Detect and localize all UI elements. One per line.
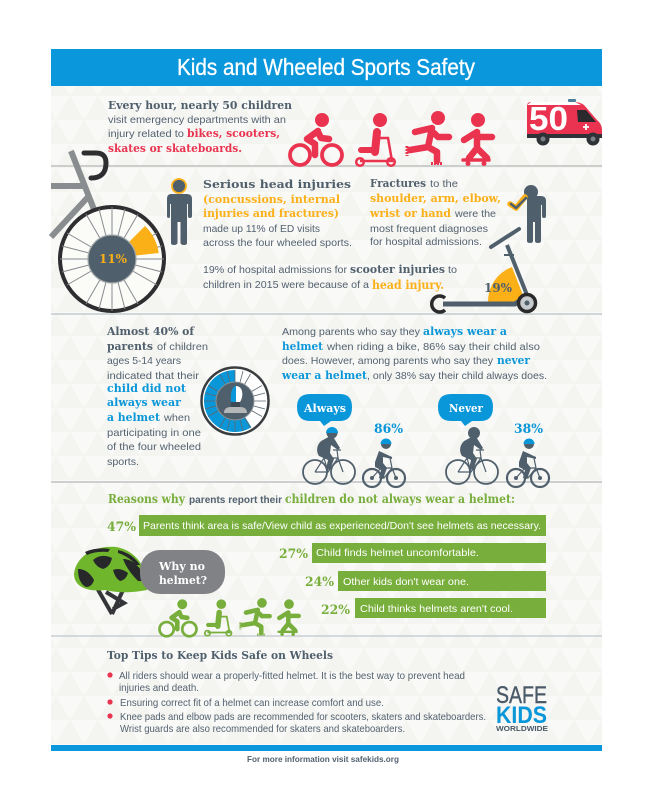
- callout: always: [297, 394, 352, 426]
- text block: scooter hospital admissions: [203, 263, 457, 292]
- text block: serious head injuries: [203, 178, 352, 249]
- text block: parents always and never: [281, 325, 547, 382]
- text block: serious head injuries: injuries and fractures): [203, 207, 339, 220]
- tips list: injuries and death.: [119, 682, 199, 694]
- bar: 27 percent: 27%: [279, 547, 309, 562]
- text block: almost 40 percent: child did not: [107, 382, 187, 395]
- text block: fractures: wrist or hand: [369, 207, 451, 220]
- icon: person with head highlighted: [167, 179, 192, 245]
- bottom blue bar: [51, 745, 602, 751]
- intro text block: visit emergency departments with an: [108, 114, 286, 126]
- text block: parents always and never: wear a helmet: [281, 369, 368, 382]
- title banner: Kids and Wheeled Sports Safety: [177, 54, 475, 80]
- bar: 22 percent: Child thinks helmets aren't cool.: [360, 603, 513, 615]
- title banner: [51, 49, 602, 86]
- callout: why no helmet: Why no: [158, 560, 205, 573]
- text block: parents always and never: does. However, among parents who say they: [282, 355, 494, 367]
- text block: almost 40 percent: a helmet: [107, 411, 161, 424]
- tips list: All riders should wear a properly-fitted helmet. It is the best way to prevent head: [119, 670, 465, 682]
- bar: 27 percent: [279, 543, 546, 563]
- text block: parents always and never: helmet: [282, 340, 324, 353]
- logo: Safe Kids Worldwide: WORLDWIDE: [496, 724, 548, 733]
- text block: fractures: [369, 177, 501, 248]
- icons: red riders: [290, 111, 492, 166]
- text block: almost 40 percent: always wear: [107, 396, 181, 409]
- callout: never: Never: [449, 402, 483, 415]
- text block: scooter hospital admissions: scooter injuries: [350, 263, 445, 276]
- callout: never: [438, 394, 493, 426]
- icon: helmeted parent on bike: [303, 427, 355, 484]
- logo: Safe Kids Worldwide: KIDS: [496, 702, 547, 729]
- bar: 47 percent: 47%: [107, 520, 137, 535]
- bar: 24 percent: [305, 571, 546, 591]
- text block: almost 40 percent: indicated that their: [107, 370, 200, 382]
- text block: serious head injuries: made up 11% of ED visits: [203, 223, 320, 235]
- heading: reasons: children do not always wear a helmet:: [285, 492, 515, 506]
- text block: almost 40 percent: Almost 40% of: [106, 325, 195, 338]
- intro text block: [108, 99, 292, 155]
- text block: parents always and never: Among parents who say they: [282, 326, 421, 338]
- bar: 47 percent: [107, 515, 546, 536]
- text block: fractures: were the: [454, 208, 496, 220]
- text block: serious head injuries: across the four wheeled sports.: [203, 237, 352, 249]
- divider lines: [51, 165, 602, 167]
- intro text block: Every hour, nearly 50 children: [108, 99, 292, 112]
- text block: parents always and never: when riding a bike, 86% say their child also: [326, 341, 540, 353]
- text block: almost 40 percent: of children: [157, 341, 208, 353]
- text block: almost 40 percent: when: [163, 412, 190, 424]
- text block: fractures: for hospital admissions.: [370, 236, 482, 248]
- tips list: Ensuring correct fit of a helmet can increase comfort and use.: [120, 697, 384, 709]
- bar: 22 percent: 22%: [321, 603, 351, 618]
- bar: 22 percent: [321, 598, 546, 618]
- icon: red inline skater: [407, 111, 449, 164]
- heading: reasons: [108, 492, 515, 506]
- heading: reasons: parents report their: [189, 494, 282, 506]
- icons: green riders: [160, 598, 299, 636]
- icon: wheel with helmet gauge: [202, 368, 268, 434]
- text block: parents always and never: , only 38% say their child always does.: [367, 370, 547, 382]
- text block: almost 40 percent: [106, 325, 208, 468]
- icon: green cyclist: [160, 599, 196, 636]
- intro text block: skates or skateboards.: [108, 142, 242, 155]
- tips list: Wrist guards are also recommended for skaters and skateboarders.: [120, 723, 405, 735]
- text block: scooter hospital admissions: children in 2015 were because of a: [203, 279, 369, 291]
- icon: ambulance: 50: [529, 100, 568, 137]
- callout: always: Always: [303, 402, 346, 415]
- icon: green scooter rider: [205, 599, 231, 636]
- bar: 47 percent: Parents think area is safe/View child as experienced/Don't see helmets as necessary.: [143, 520, 541, 532]
- logo: Safe Kids Worldwide: SAFE: [496, 682, 547, 709]
- icon: bicycle wheel 11%: 11%: [99, 252, 128, 266]
- callout: why no helmet: [140, 550, 225, 594]
- intro text block: bikes, scooters,: [187, 127, 280, 140]
- intro text block: injury related to: [108, 128, 184, 140]
- icon: bike helmet: [74, 547, 148, 614]
- tips list: [107, 670, 486, 735]
- text block: almost 40 percent: participating in one: [107, 427, 201, 439]
- tips list: Knee pads and elbow pads are recommended for scooters, skaters and skateboarders.: [120, 711, 486, 723]
- callout: why no helmet: helmet?: [159, 574, 207, 587]
- text block: scooter hospital admissions: to: [448, 264, 457, 276]
- bar: 27 percent: Child finds helmet uncomfortable.: [316, 547, 479, 559]
- text block: serious head injuries: Serious head injuries: [203, 178, 351, 191]
- text block: parents always and never: never: [497, 354, 530, 367]
- text block: fractures: most frequent diagnoses: [370, 223, 488, 235]
- stat: 38 percent: 38%: [514, 422, 544, 437]
- text block: almost 40 percent: of the four wheeled: [107, 441, 201, 453]
- text block: serious head injuries: (concussions, internal: [203, 193, 340, 206]
- icon: green inline skater: [240, 598, 270, 635]
- icon: person with arm highlighted: [510, 185, 546, 243]
- icon: scooter 19%: [432, 229, 536, 312]
- text block: almost 40 percent: parents: [107, 340, 153, 353]
- footer link text: For more information visit safekids.org: [247, 754, 399, 764]
- text block: parents always and never: always wear a: [423, 325, 507, 338]
- stat: 86 percent: 86%: [374, 422, 404, 437]
- icon: green skateboarder: [279, 599, 299, 636]
- icon: bare-headed parent on bike: [446, 427, 498, 484]
- bar: 24 percent: 24%: [305, 575, 335, 590]
- text block: fractures: Fractures: [370, 177, 426, 190]
- logo: Safe Kids Worldwide: [496, 682, 548, 733]
- text block: almost 40 percent: sports.: [107, 456, 139, 468]
- text block: scooter hospital admissions: head injury.: [372, 278, 444, 292]
- icon: red cyclist: [290, 113, 342, 165]
- text block: fractures: to the: [430, 178, 458, 190]
- heading: reasons: Reasons why: [108, 492, 186, 506]
- bar: 24 percent: Other kids don't wear one.: [343, 576, 469, 588]
- icon: red skateboarder: [463, 113, 492, 166]
- page panel background: [51, 49, 602, 751]
- icon: ambulance: [527, 99, 602, 146]
- icon: red scooter rider: [356, 113, 395, 166]
- icon: scooter 19%: 19%: [484, 281, 513, 295]
- heading: top tips: Top Tips to Keep Kids Safe on Wheels: [107, 649, 333, 662]
- text block: scooter hospital admissions: 19% of hospital admissions for: [203, 264, 348, 276]
- icon: helmeted child on bike, never: [507, 438, 549, 487]
- text block: fractures: shoulder, arm, elbow,: [370, 192, 501, 205]
- icon: bicycle wheel 11%: [51, 151, 164, 311]
- icon: helmeted child on bike, always: [363, 438, 405, 487]
- text block: almost 40 percent: ages 5-14 years: [107, 355, 181, 367]
